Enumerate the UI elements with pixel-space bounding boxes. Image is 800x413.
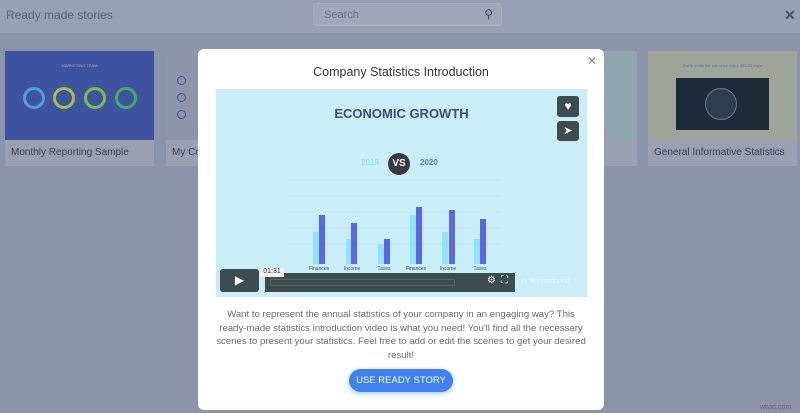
video controls: ▶: [235, 273, 244, 287]
search box: ⚲: [484, 7, 493, 21]
card: My Co (partial): My Co: [172, 147, 201, 158]
button: [349, 369, 453, 392]
header bar: [0, 0, 800, 33]
video: ▷ Renderforest: [522, 278, 570, 285]
video: [216, 89, 587, 297]
video controls: ⛶: [501, 275, 508, 286]
share button: ➤: [563, 125, 573, 137]
header title: Ready made stories: [6, 8, 113, 22]
card: My Co (partial): [166, 51, 206, 166]
bar chart: Taxes: [377, 266, 391, 272]
modal title: Company Statistics Introduction: [313, 65, 489, 79]
bar chart: Taxes: [473, 266, 487, 272]
modal: [198, 49, 604, 410]
watermark: wtvid.com: [760, 404, 791, 411]
card: General Informative Statistics: General Informative Statistics: [654, 147, 785, 158]
legend: 2019: [361, 158, 379, 167]
bar chart: Income: [344, 266, 360, 272]
button: USE READY STORY: [356, 375, 446, 386]
description: Want to represent the annual statistics of your company in an engaging way? This ready-made statistics introduction video is what you need! You'll find all the necessary scenes to present your statistics. Feel free to add or edit the scenes to get your desired result!: [216, 309, 586, 360]
legend: VS: [392, 158, 406, 169]
card: Monthly Reporting Sample: MARKETING TEAM: [62, 63, 97, 68]
modal close: ✕: [587, 54, 597, 68]
bar chart: Income: [440, 266, 456, 272]
card: General Informative Statistics: Earth orbits the sun once every 365.25 days: [683, 63, 762, 68]
like button: [557, 96, 579, 117]
card: Monthly Reporting Sample: [5, 51, 154, 166]
share button: [557, 121, 579, 141]
card: partial right: [595, 51, 637, 166]
video controls: 01:31: [263, 268, 281, 275]
video controls: [220, 268, 515, 292]
legend: 2020: [420, 158, 438, 167]
like button: ♥: [564, 99, 572, 113]
bar chart: Finances: [406, 266, 427, 272]
card: General Informative Statistics: [648, 51, 797, 166]
search box: Search: [324, 9, 359, 21]
video title: ECONOMIC GROWTH: [334, 106, 469, 121]
close icon: ✕: [784, 7, 796, 23]
search box: [313, 3, 502, 26]
bar chart: [288, 180, 501, 272]
bar chart: Finances: [309, 266, 330, 272]
video controls: ⚙: [487, 275, 496, 286]
legend: [361, 153, 438, 175]
card: Monthly Reporting Sample: Monthly Reporting Sample: [11, 147, 129, 158]
